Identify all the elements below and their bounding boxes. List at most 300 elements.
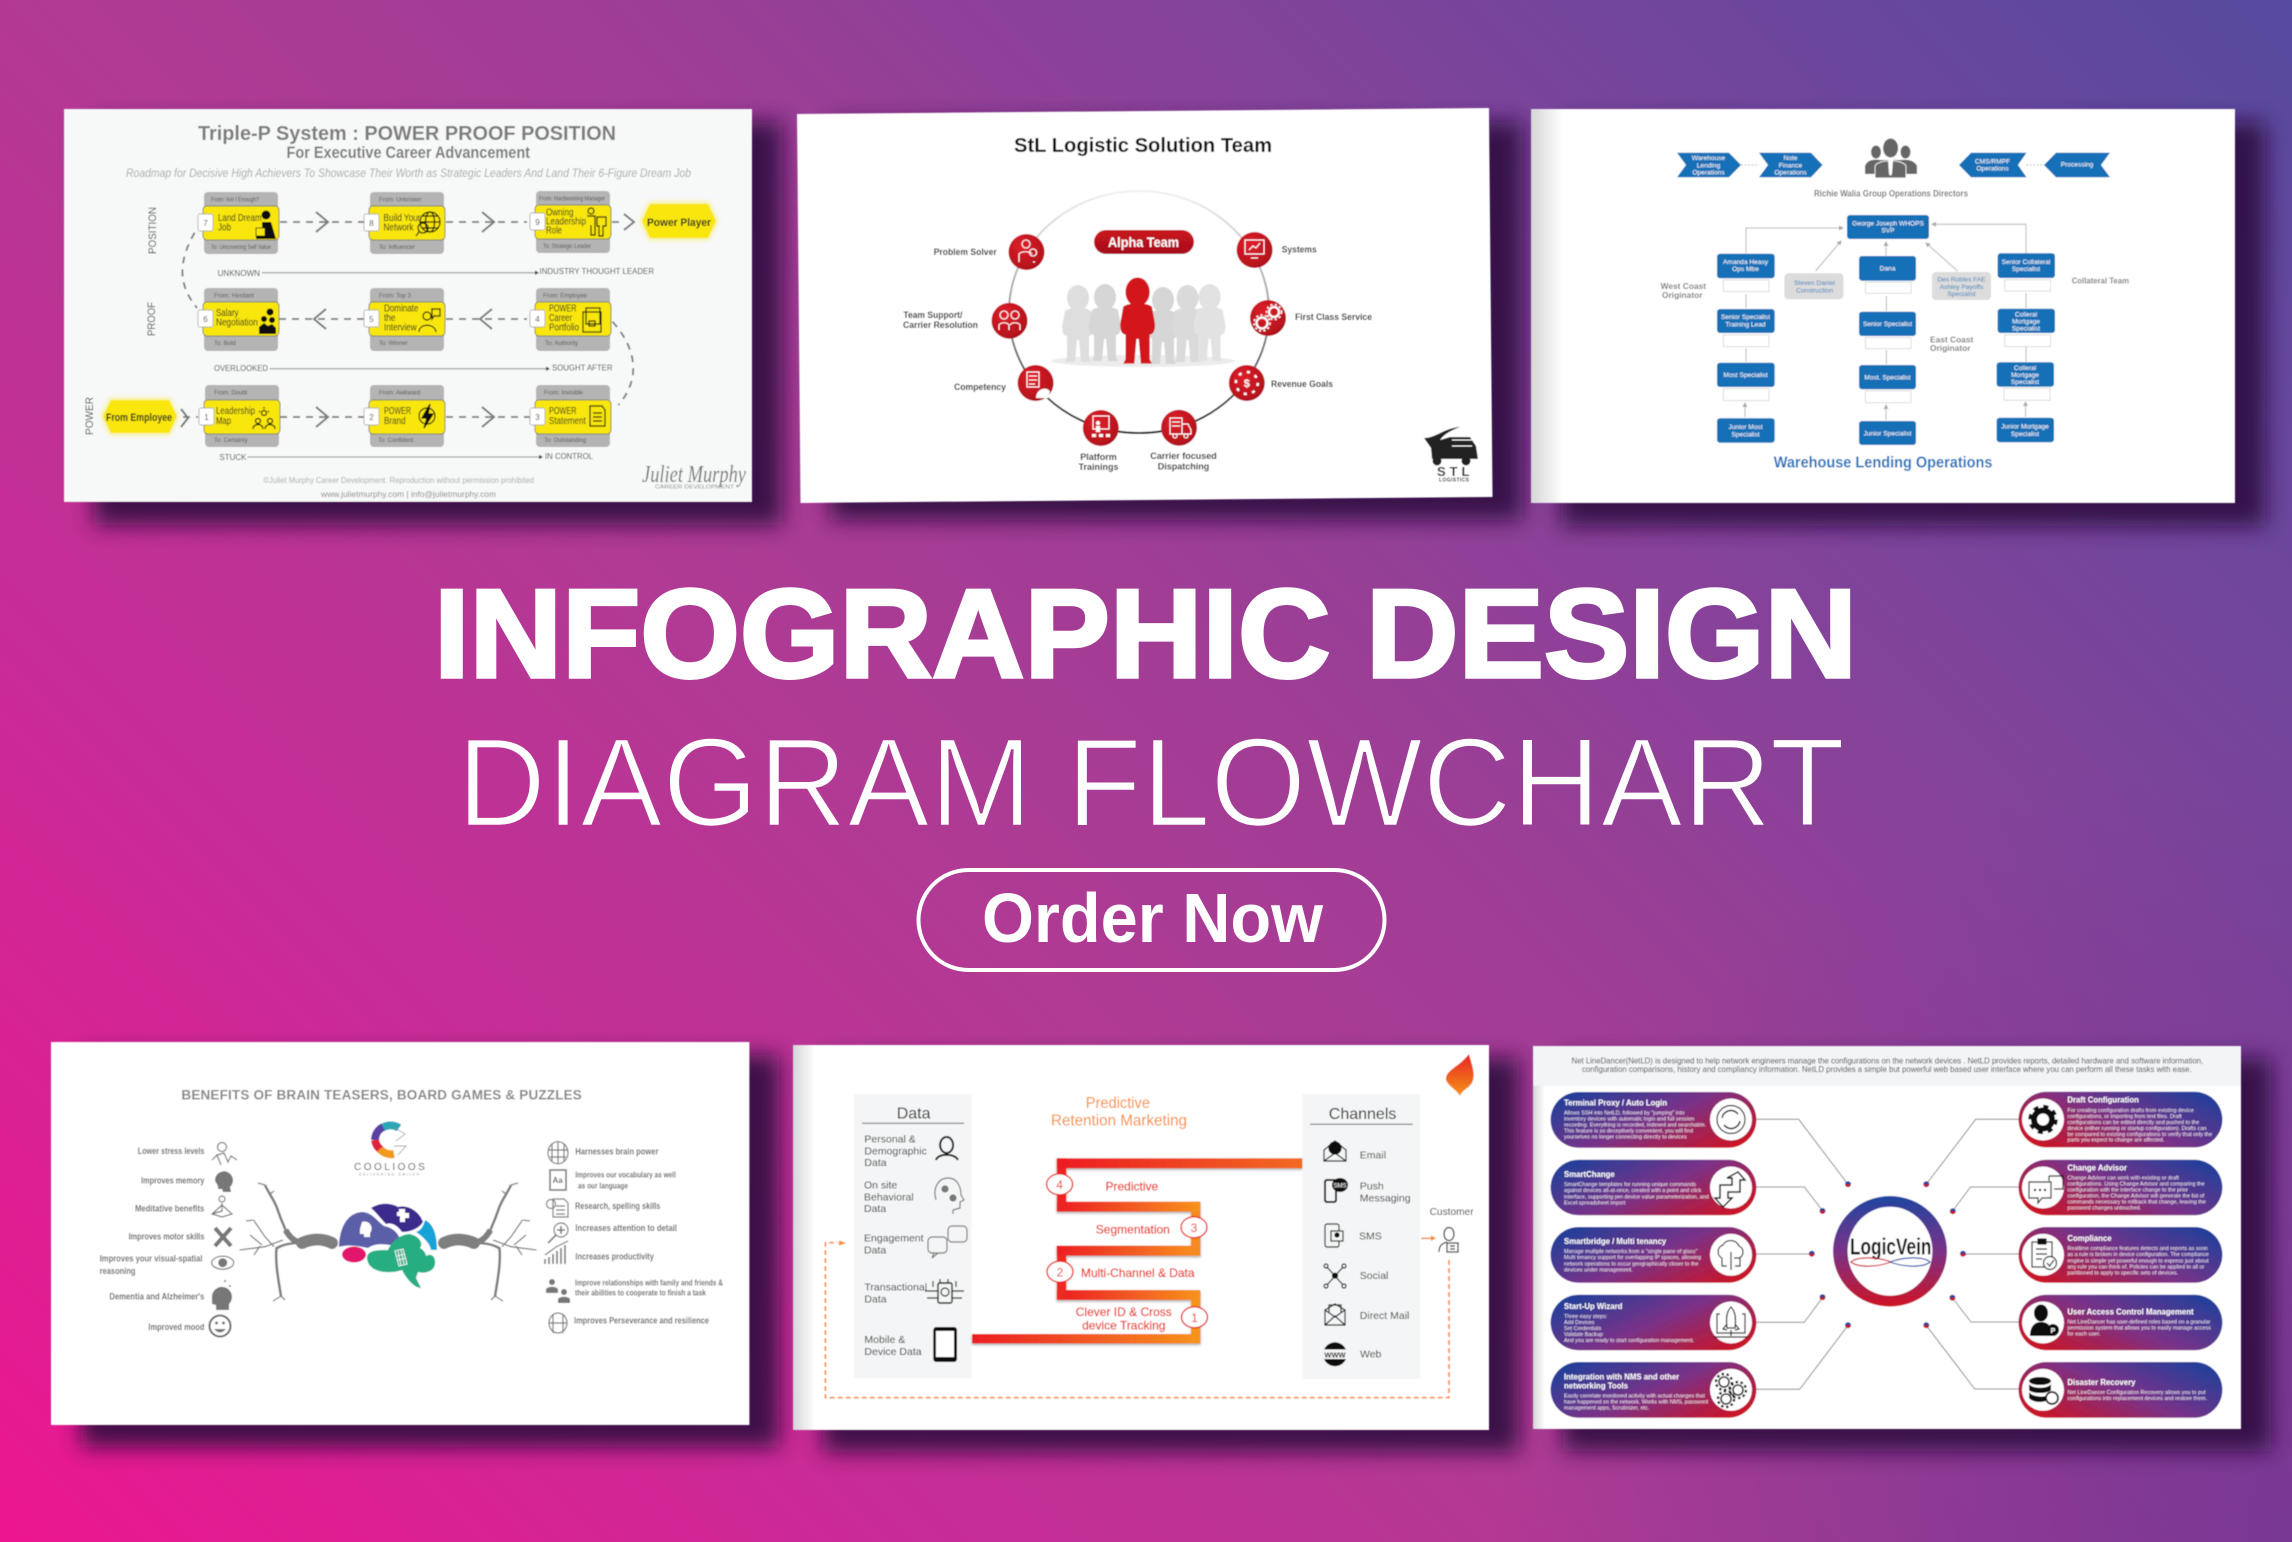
card 1 Leadership Map: From: Doubt	[214, 390, 248, 396]
card 9 Owning Leadership Role: Role	[546, 226, 562, 236]
pill: SmartChange: against devices all-at-once, created with a point and click	[1564, 1188, 1702, 1194]
logo: Coolioos: COOLIOOS	[354, 1162, 425, 1173]
pill: Integration with NMS: Integration with NMS and other	[1564, 1373, 1679, 1382]
hexagon: From Employee	[101, 398, 178, 435]
card 6 Salary Negotiation	[198, 288, 279, 351]
logo: STL Logistics truck: STL	[1437, 464, 1470, 479]
column: West Coast team: Ops Mbe	[1732, 266, 1759, 273]
card 3 POWER Statement: 3	[535, 413, 540, 422]
chevron: Warehouse Lending Operations: Lending	[1697, 162, 1721, 169]
logo: LogicVein: LogicVein	[1850, 1233, 1931, 1259]
panel: Benefits of Brain Teasers	[51, 1042, 749, 1425]
step 4 Predictive	[1047, 1174, 1159, 1195]
label: Problem Solver: Problem Solver	[934, 247, 997, 257]
step 2 Multi-Channel and Data	[1047, 1261, 1195, 1282]
box: Steven Daniel: Construction	[1796, 288, 1833, 294]
box: Channels: Channels	[1329, 1106, 1396, 1123]
data labels: Transactional	[864, 1282, 927, 1294]
pill: Change Advisor: configurations. Using Change Advisor and comparing the	[2067, 1181, 2205, 1187]
pill: Start-Up Wizard: Start-Up Wizard	[1564, 1302, 1623, 1311]
icon: platform trainings	[1083, 410, 1119, 446]
pill: Start-Up Wizard: Three easy steps:	[1564, 1314, 1608, 1320]
step 1 Clever ID and Cross device Tracking: device Tracking	[1082, 1319, 1165, 1333]
card 1 Leadership Map: Map	[216, 416, 231, 427]
card 8 Build Your Network: Build Your	[384, 213, 421, 224]
card 4 POWER Career Portfolio: 4	[535, 315, 540, 324]
zig-zag ribbon	[972, 1158, 1302, 1344]
logo: Juliet Murphy: CAREER DEVELOPMENT	[655, 484, 735, 490]
card 2 POWER Brand: POWER	[384, 406, 411, 417]
icon: revenue goals	[1229, 365, 1265, 401]
label: Revenue Goals: Revenue Goals	[1271, 379, 1333, 389]
label: Platform Trainings: Trainings	[1078, 462, 1119, 472]
channel labels: Social	[1360, 1270, 1388, 1282]
row label: POSITION: POSITION	[147, 207, 159, 254]
right benefits list: Improves our vocabulary as well	[575, 1170, 676, 1180]
progress line: STUCK to IN CONTROL: IN CONTROL	[545, 451, 593, 461]
chevron: Processing	[2044, 153, 2110, 177]
hexagon: Power Player: Power Player	[647, 217, 712, 229]
logo: STL Logistics truck: LOGISTICS	[1439, 478, 1470, 484]
pill: Disaster Recovery: Net LineDancer Configuration Recovery allows you to put	[2067, 1390, 2206, 1396]
subheading: For Executive Career Advancement: For Executive Career Advancement	[286, 143, 530, 162]
right benefit icons: Aa	[552, 1176, 563, 1185]
label: West Coast Originator	[1661, 281, 1706, 300]
pill: Compliance: engine is simple yet powerful enough to express just about	[2067, 1258, 2209, 1264]
right benefits list: Increases attention to detail	[575, 1223, 677, 1234]
pill: Smartbridge: Manage multiple networks from a "single pane of glass"	[1564, 1249, 1698, 1255]
right benefits list: Harnesses brain power	[575, 1146, 659, 1157]
channel labels: Direct Mail	[1360, 1310, 1409, 1322]
card 6 Salary Negotiation: To: Bold	[214, 341, 236, 347]
column: Collateral team: Specialist	[2012, 326, 2040, 332]
panel: Triple-P System	[64, 109, 752, 502]
pill: Smartbridge: devices under management.	[1564, 1267, 1633, 1273]
progress line: STUCK to IN CONTROL: STUCK	[219, 452, 247, 462]
card 7 Land Dream Job: To: Uncovering Self Value	[211, 245, 272, 251]
icon: team support	[992, 303, 1028, 339]
icon: systems	[1237, 232, 1273, 268]
pill: SmartChange: SmartChange templates for running unique commands	[1564, 1182, 1696, 1188]
channel labels: Push	[1360, 1180, 1384, 1192]
heading: Benefits of Brain Teasers: BENEFITS OF BRAIN TEASERS, BOARD GAMES & PUZZLES	[181, 1087, 582, 1102]
pill: Terminal Proxy: recording. Everything is recorded, indexed and searchable.	[1564, 1122, 1707, 1128]
pill: Terminal Proxy	[1551, 1092, 1756, 1148]
left benefits list	[100, 1146, 205, 1333]
channel labels	[1359, 1149, 1411, 1361]
chevron: Processing: Processing	[2061, 162, 2094, 169]
column: Collateral team: Colleral	[2015, 312, 2038, 318]
card 5 Dominate the Interview: Dominate	[384, 304, 419, 314]
label: West Coast Originator: Originator	[1662, 290, 1703, 300]
heading: Predictive Retention Marketing: Retention Marketing	[1051, 1113, 1187, 1130]
card 4 POWER Career Portfolio: From: Employee	[543, 294, 588, 300]
card 3 POWER Statement	[530, 385, 611, 447]
card 5 Dominate the Interview: the	[384, 313, 396, 324]
card 1 Leadership Map: Leadership	[216, 406, 255, 417]
step 3 Segmentation: 3	[1191, 1221, 1198, 1235]
pill: Smartbridge: network operations to occur geographically closer to the	[1564, 1261, 1699, 1267]
card 9 Owning Leadership Role: 9	[535, 218, 540, 227]
icon: carrier dispatching	[1161, 410, 1197, 446]
chevron: Warehouse Lending Operations: Operations	[1692, 169, 1725, 176]
label: Carrier focused Dispatching: Dispatching	[1158, 462, 1209, 472]
pill: Draft Configuration	[2018, 1092, 2222, 1147]
step 1 Clever ID and Cross device Tracking: Clever ID & Cross	[1076, 1305, 1172, 1319]
card 7 Land Dream Job: Job	[218, 222, 231, 234]
intro band: Net LineDancer(NetLD) is designed to help network engineers manage the configurations on the network devices . NetLD provides reports, detailed hardware and software information,	[1572, 1055, 2203, 1065]
column: East Coast team: Most. Specialist	[1864, 374, 1911, 382]
column: Collateral team: Colleral	[2014, 365, 2037, 372]
card 9 Owning Leadership Role: From: Hardworking Manager	[539, 196, 605, 202]
logo: LogicVein	[1833, 1196, 1947, 1307]
box: Data	[854, 1094, 971, 1378]
data labels: Demographic	[864, 1145, 927, 1157]
neurons	[240, 1183, 536, 1301]
data labels: Engagement	[864, 1233, 924, 1245]
card 9 Owning Leadership Role	[530, 191, 611, 253]
column: Collateral team: Mortgage	[2011, 372, 2039, 379]
box: Des Robles: Ashley Payoffs	[1940, 284, 1984, 291]
card 7 Land Dream Job: Land Dream	[218, 213, 262, 224]
left benefits list: Improves motor skills	[129, 1231, 204, 1242]
pill: Change Advisor: configuration, the Change Advisor will generate the list of	[2067, 1194, 2205, 1200]
label: Carrier focused Dispatching: Carrier focused	[1150, 451, 1217, 461]
logo: STL Logistics truck	[1424, 427, 1478, 484]
card 3 POWER Statement: To: Outstanding	[544, 438, 586, 444]
channel labels: Messaging	[1360, 1193, 1411, 1205]
pill: Start-Up Wizard	[1551, 1295, 1756, 1350]
pill: User Access Control Management: P	[2051, 1328, 2056, 1335]
pill: Terminal Proxy: Terminal Proxy / Auto Login	[1564, 1099, 1667, 1108]
column: Collateral team: Specialist	[2012, 266, 2040, 273]
card 6 Salary Negotiation: Salary	[216, 308, 238, 319]
chevron: Warehouse Lending Operations: Warehouse	[1692, 155, 1726, 162]
card 2 POWER Brand	[364, 385, 445, 447]
progress line: STUCK to IN CONTROL	[219, 451, 593, 462]
card 5 Dominate the Interview: Interview	[384, 322, 417, 334]
box: Des Robles	[1932, 272, 1991, 300]
subtitle: DIAGRAM FLOWCHART	[457, 712, 1845, 853]
left benefits list: Improves memory	[141, 1175, 205, 1186]
data labels: Data	[864, 1245, 886, 1257]
data labels	[864, 1133, 927, 1358]
pill: SmartChange: interface, supporting per-device value parameterization, and	[1564, 1194, 1709, 1200]
channel icons	[1322, 1141, 1348, 1366]
column: East Coast team: Senior Specialist	[1863, 321, 1912, 328]
label: East Coast Originator: East Coast	[1930, 334, 1973, 344]
pill: Smartbridge: Smartbridge / Multi tenancy	[1564, 1237, 1667, 1246]
pill: SmartChange: SmartChange	[1564, 1170, 1615, 1179]
data labels: Data	[864, 1203, 886, 1215]
column: West Coast team: Most Specialist	[1723, 372, 1768, 379]
card 2 POWER Brand: Brand	[384, 416, 406, 427]
pill: Draft Configuration: configurations can be edited directly and pushed to the	[2067, 1120, 2199, 1126]
column: West Coast team	[1717, 254, 1775, 443]
column: Collateral team: Senior Collateral	[2002, 259, 2051, 266]
step 1 Clever ID and Cross device Tracking: 1	[1191, 1311, 1198, 1325]
progress line: UNKNOWN to INDUSTRY THOUGHT LEADER	[218, 266, 654, 278]
right benefits list: their abilities to cooperate to finish a task	[575, 1288, 706, 1298]
right benefit icons	[545, 1142, 570, 1333]
pill: Compliance: as a rule is broken in device configuration. The compliance	[2067, 1252, 2209, 1258]
label: Team Support/Carrier Resolution: Team Support/	[903, 310, 963, 320]
card 6 Salary Negotiation: From: Hesitant	[214, 294, 254, 300]
column: Collateral team	[1997, 253, 2055, 442]
left benefit icons	[210, 1142, 237, 1336]
pill: Integration with NMS: Easily correlate monitored activity with actual changes that	[1564, 1393, 1705, 1399]
pill: Draft Configuration: parts you expect to change are affected.	[2067, 1138, 2165, 1144]
chevron: Note Finance Operations: Operations	[1774, 169, 1807, 176]
connector lines	[1756, 1119, 2018, 1389]
card 1 Leadership Map: To: Certainty	[214, 438, 248, 444]
flow arrows	[181, 212, 634, 427]
pill: Draft Configuration: configurations, or importing from text files. Draft	[2067, 1114, 2182, 1120]
pill: User Access Control Management	[2018, 1295, 2222, 1350]
pill: Alpha Team: Alpha Team	[1108, 234, 1179, 250]
logo: Coolioos: DELIVERING SMILES	[359, 1173, 420, 1177]
channel icons: WWW	[1324, 1350, 1347, 1360]
card 2 POWER Brand: From: Awkward	[379, 390, 420, 396]
column: East Coast team	[1859, 256, 1916, 445]
label: Team Support/Carrier Resolution	[903, 310, 978, 330]
pill: Disaster Recovery: configurations into replacement devices and restore them.	[2067, 1396, 2208, 1402]
card 2 POWER Brand: To: Confident	[378, 438, 414, 444]
pill: User Access Control Management: Net LineDancer has user-defined roles based on a granular	[2067, 1319, 2211, 1325]
pill: Change Advisor: Change Advisor	[2067, 1163, 2127, 1172]
card 6 Salary Negotiation: 6	[203, 315, 208, 324]
data labels: Personal &	[864, 1133, 916, 1145]
icon: directors group	[1865, 138, 1917, 178]
card 7 Land Dream Job: From: Am I Enough?	[211, 198, 260, 204]
pill: SmartChange: Excel spreadsheet import	[1564, 1200, 1626, 1206]
pill: Compliance: Compliance	[2067, 1234, 2112, 1243]
copyright footer: www.julietmurphy.com | info@julietmurphy.com	[320, 489, 496, 499]
panel: StL Logistic Solution Team	[797, 108, 1492, 503]
pill: Draft Configuration: device (either running or startup configuration). Drafts can	[2067, 1126, 2206, 1132]
column: West Coast team: Senior Specialist	[1721, 314, 1770, 321]
data labels: Device Data	[864, 1346, 922, 1358]
step 2 Multi-Channel and Data: Multi-Channel & Data	[1081, 1266, 1195, 1280]
right benefits list	[574, 1146, 723, 1327]
copyright footer: ©Juliet Murphy Career Development. Reproduction without permission prohibited	[264, 476, 534, 485]
pill: Start-Up Wizard: Validate Backup	[1564, 1332, 1603, 1338]
pill: Disaster Recovery: Disaster Recovery	[2067, 1378, 2136, 1387]
brain	[339, 1204, 437, 1288]
pill: User Access Control Management: User Access Control Management	[2067, 1307, 2194, 1316]
card 1 Leadership Map: 1	[204, 413, 209, 422]
pill: Smartbridge: Multi tenancy support for overlapping IP spaces, allowing	[1564, 1255, 1701, 1261]
column: West Coast team: Junior Most	[1728, 424, 1763, 431]
label: Richie Walia Group Operations Directors: Richie Walia Group Operations Directors	[1814, 189, 1968, 200]
progress line: UNKNOWN to INDUSTRY THOUGHT LEADER: INDUSTRY THOUGHT LEADER	[540, 266, 654, 276]
card 7 Land Dream Job: 7	[203, 219, 208, 228]
chevron: CMS/RMPF Operations: Operations	[1976, 166, 2009, 173]
progress line: OVERLOOKED to SOUGHT AFTER	[214, 363, 612, 373]
column: Collateral team: Specialist	[2011, 379, 2039, 386]
left benefits list: reasoning	[100, 1266, 136, 1277]
step 3 Segmentation	[1096, 1217, 1207, 1238]
data labels: On site	[864, 1179, 897, 1191]
pill: Change Advisor: password changes untouched.	[2067, 1205, 2142, 1211]
logo: Coolioos	[354, 1125, 425, 1177]
pill: Terminal Proxy: This feature is so deceptively convenient, you will find	[1564, 1128, 1693, 1134]
pill: Start-Up Wizard: Add Devices	[1564, 1320, 1595, 1326]
column: Collateral team: Junior Mortgage	[2001, 424, 2049, 430]
heading: Predictive Retention Marketing: Predictive	[1086, 1095, 1150, 1112]
card 7 Land Dream Job	[198, 192, 279, 254]
box: Data: Data	[897, 1105, 931, 1122]
left benefits list: Improved mood	[148, 1322, 205, 1333]
card 8 Build Your Network: 8	[369, 219, 374, 228]
card 4 POWER Career Portfolio: POWER	[549, 304, 576, 314]
card 8 Build Your Network	[364, 192, 445, 254]
copyright footer	[264, 476, 534, 499]
box: Steven Daniel	[1784, 273, 1843, 299]
card 8 Build Your Network: From: Unknown	[379, 198, 421, 204]
left benefits list: Lower stress levels	[138, 1146, 204, 1157]
channel labels: SMS	[1359, 1230, 1382, 1242]
label: Platform Trainings	[1078, 452, 1119, 472]
label: Platform Trainings: Platform	[1080, 452, 1117, 462]
box: Des Robles: Des Robles FAE	[1937, 276, 1986, 284]
column: Collateral team: Specialist	[2011, 431, 2039, 438]
icon: competency	[1018, 365, 1054, 401]
column: East Coast team: Junior Specialist	[1863, 430, 1912, 438]
hexagon: From Employee: From Employee	[106, 412, 172, 424]
progress line: UNKNOWN to INDUSTRY THOUGHT LEADER: UNKNOWN	[218, 268, 260, 278]
left benefits list: Improves your visual-spatial	[100, 1254, 202, 1265]
pill: Compliance	[2018, 1227, 2222, 1283]
pill: Draft Configuration: Draft Configuration	[2067, 1096, 2139, 1105]
chevron: CMS/RMPF Operations: CMS/RMPF	[1975, 158, 2010, 165]
row label: POWER: POWER	[84, 397, 96, 435]
label: East Coast Originator: Originator	[1930, 343, 1971, 353]
pill: Start-Up Wizard: And you are ready to start configuration management.	[1564, 1338, 1694, 1344]
left benefits list: Dementia and Alzheimer's	[109, 1291, 204, 1302]
logo: Juliet Murphy: Juliet Murphy	[642, 462, 746, 488]
pill: Integration with NMS: have happened on the network. Works with NMS, password	[1564, 1399, 1708, 1405]
card 3 POWER Statement: POWER	[549, 406, 576, 417]
customer	[1421, 1207, 1474, 1252]
heading: StL Logistic Solution Team: StL Logistic Solution Team	[1014, 135, 1272, 157]
pill: Integration with NMS: management apps, Scrutinizer, etc.	[1564, 1406, 1650, 1412]
right benefits list: Improves Perseverance and resilience	[574, 1316, 709, 1327]
card 3 POWER Statement: From: Invisible	[544, 390, 584, 396]
icon: flame logo	[1446, 1054, 1474, 1096]
org chart connectors	[1745, 224, 2026, 420]
icon: problem solver	[1008, 234, 1044, 270]
data labels: Data	[864, 1294, 887, 1306]
card 4 POWER Career Portfolio: Portfolio	[549, 322, 579, 334]
card 9 Owning Leadership Role: To: Strategic Leader	[543, 244, 591, 250]
label: Team Support/Carrier Resolution: Carrier Resolution	[903, 320, 978, 330]
data icons	[925, 1137, 967, 1362]
icon: revenue goals: $	[1244, 378, 1250, 390]
intro band	[1533, 1046, 2241, 1086]
channel labels: Web	[1360, 1349, 1382, 1361]
pill: User Access Control Management: permission system that allows you to easily manage access	[2067, 1326, 2211, 1332]
card 8 Build Your Network: Network	[384, 222, 414, 234]
box: Des Robles: Specialist	[1947, 291, 1976, 298]
pill: Integration with NMS	[1551, 1362, 1756, 1418]
label: First Class Service: First Class Service	[1295, 312, 1372, 322]
label: Carrier focused Dispatching	[1150, 451, 1217, 472]
pill: User Access Control Management: for each user.	[2067, 1332, 2101, 1338]
chevron: Warehouse Lending Operations	[1677, 153, 1741, 177]
channel labels: Email	[1360, 1149, 1386, 1161]
data labels: Data	[864, 1157, 887, 1169]
box: George Joseph: George Joseph WHOPS	[1852, 221, 1925, 228]
channel icons: SMS	[1333, 1184, 1347, 1190]
step 4 Predictive: Predictive	[1106, 1179, 1159, 1193]
hexagon: Power Player	[640, 202, 718, 240]
chevron: CMS/RMPF Operations	[1959, 153, 2026, 177]
pill: Draft Configuration: For creating configuration drafts from existing device	[2067, 1108, 2194, 1114]
label: Competency: Competency	[954, 382, 1006, 392]
pill: Compliance: partitioned to apply to specific sets of devices.	[2067, 1270, 2179, 1276]
pill: Terminal Proxy: inventory devices with automatic login and full session	[1564, 1116, 1694, 1122]
step 2 Multi-Channel and Data: 2	[1057, 1266, 1064, 1280]
card 5 Dominate the Interview	[364, 288, 445, 351]
team figures	[1051, 277, 1235, 367]
label: Collateral Team: Collateral Team	[2072, 275, 2129, 285]
pill: Integration with NMS: networking Tools	[1564, 1381, 1629, 1390]
column: East Coast team: Dana	[1880, 266, 1896, 272]
pill: Start-Up Wizard: Set Credentials	[1564, 1326, 1601, 1332]
data labels: Behavioral	[864, 1191, 914, 1203]
step 3 Segmentation: Segmentation	[1096, 1222, 1170, 1236]
column: Collateral team: Mortgage	[2012, 318, 2040, 326]
chevron: Note Finance Operations: Note	[1784, 155, 1798, 162]
card 5 Dominate the Interview: 5	[369, 315, 374, 324]
order now button	[918, 870, 1384, 970]
card 9 Owning Leadership Role: Leadership	[546, 216, 586, 228]
main title: INFOGRAPHIC DESIGN	[434, 563, 1857, 704]
card 4 POWER Career Portfolio	[530, 288, 611, 351]
card 9 Owning Leadership Role: Owning	[546, 208, 574, 218]
column: West Coast team: Specialist	[1731, 432, 1760, 438]
order now button: Order Now	[982, 879, 1324, 957]
pill: Change Advisor: configuration with the interface change to the prior	[2067, 1188, 2188, 1194]
pill: Terminal Proxy: yourselves no longer connecting directly to devices	[1564, 1134, 1687, 1140]
chevron: Note Finance Operations	[1759, 153, 1823, 177]
pill: Change Advisor: commands necessary to rollback that change, leaving the	[2067, 1199, 2206, 1205]
pill: Change Advisor: Change Advisor can work with existing or draft	[2067, 1175, 2179, 1181]
progress line: OVERLOOKED to SOUGHT AFTER: OVERLOOKED	[214, 363, 268, 373]
pill: Compliance: any rule you can think of. Policies can be applied to all or	[2067, 1264, 2205, 1270]
label: East Coast Originator	[1930, 334, 1973, 353]
pill: SmartChange	[1551, 1160, 1756, 1215]
panel: Predictive Retention Marketing	[793, 1045, 1489, 1430]
right benefits list: as our language	[578, 1180, 628, 1190]
heading: Predictive Retention Marketing	[1051, 1095, 1187, 1130]
right benefits list: Research, spelling skills	[575, 1201, 660, 1212]
pill: Draft Configuration: be compared to existing configurations to verify that only the	[2067, 1132, 2212, 1138]
label: Systems: Systems	[1282, 245, 1317, 255]
panel: LogicVein	[1533, 1046, 2241, 1429]
box: Channels	[1302, 1094, 1420, 1379]
card 1 Leadership Map	[199, 385, 280, 447]
row label: PROOF: PROOF	[146, 302, 158, 336]
panel: Warehouse Lending Operations	[1531, 109, 2235, 503]
customer: Customer	[1430, 1207, 1474, 1218]
card 4 POWER Career Portfolio: Career	[549, 313, 572, 324]
column: West Coast team: Training Lead	[1725, 322, 1766, 328]
pill: Change Advisor	[2018, 1160, 2222, 1215]
tagline: Roadmap for Decisive High Achievers To Showcase Their Worth as Strategic Leaders And Land Their 6-Figure Dream Job	[126, 166, 691, 180]
step 4 Predictive: 4	[1056, 1178, 1063, 1192]
